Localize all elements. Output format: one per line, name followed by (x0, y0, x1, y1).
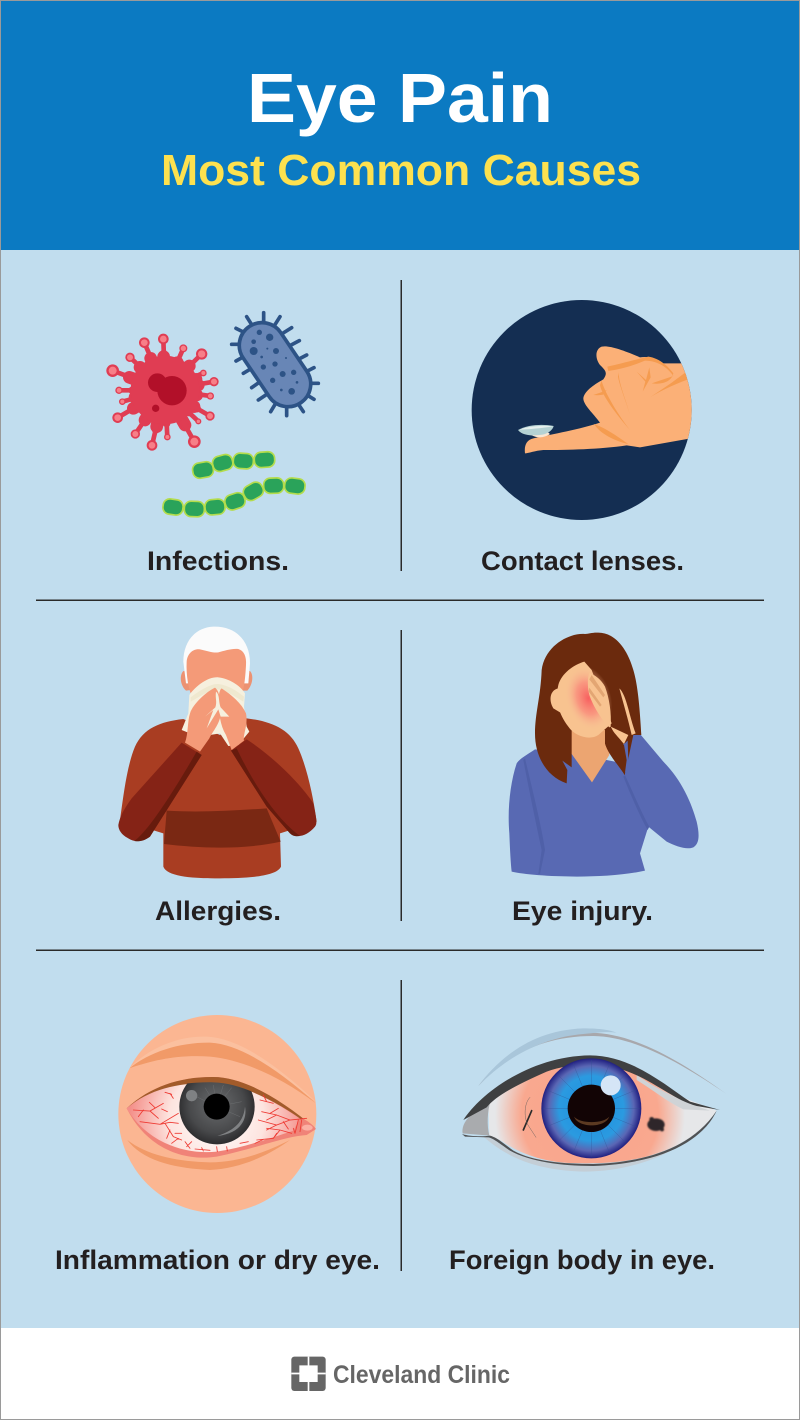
sclera (488, 1062, 717, 1163)
footer band (0, 1328, 800, 1420)
neck (570, 730, 609, 782)
highlights (186, 1090, 197, 1101)
icon: blue bacterium (230, 313, 320, 416)
tissue (182, 677, 249, 746)
contact lens (518, 425, 554, 437)
icon: red virus (106, 334, 219, 451)
iris (541, 1058, 641, 1158)
lower lid shadow (483, 1112, 717, 1172)
sclera (127, 1083, 310, 1152)
label: allergies: Allergies. (155, 896, 281, 926)
pain glow (556, 660, 620, 737)
eyebrow fold (478, 1033, 727, 1094)
label: infections: Infections. (147, 546, 289, 576)
hand (588, 673, 628, 744)
ear (551, 688, 562, 713)
subtitle: Most Common Causes (161, 146, 641, 195)
hair strand (605, 727, 627, 775)
lid rim (127, 1077, 316, 1158)
right hand (219, 688, 247, 750)
hair (535, 633, 641, 783)
hand creases (593, 357, 693, 444)
icon: red inflamed eye (118, 1015, 316, 1213)
sweater (509, 730, 699, 877)
corner (462, 1100, 491, 1136)
iris (179, 1082, 255, 1144)
eyelash foreign body (523, 1097, 536, 1137)
lower lid crease (127, 1140, 290, 1170)
veins (133, 1092, 307, 1152)
highlight (601, 1075, 621, 1095)
logo mark (291, 1357, 326, 1391)
tear duct (292, 1118, 316, 1135)
pupil (204, 1094, 230, 1120)
pupil (568, 1085, 615, 1132)
skin circle (118, 1015, 316, 1213)
upper lid (463, 1055, 720, 1120)
icon: infections (virus, bacterium, chains) (106, 313, 320, 517)
left sleeve (118, 743, 202, 841)
face (557, 662, 612, 738)
label: eye injury: Eye injury. (512, 896, 653, 926)
logo text: Cleveland Clinic (333, 1361, 510, 1389)
left hand (185, 688, 221, 752)
speck foreign body (647, 1117, 665, 1131)
icon: foreign body in eye (462, 1028, 727, 1172)
label: foreign body: Foreign body in eye. (449, 1245, 715, 1275)
sweater body (120, 718, 317, 878)
lid shadow (637, 1075, 710, 1111)
title: Eye Pain (247, 59, 553, 137)
icon: man blowing nose (118, 627, 317, 878)
header band (0, 0, 800, 250)
face (187, 649, 246, 700)
sweater band (164, 808, 281, 848)
hair (183, 627, 250, 683)
icon: woman holding injured eye (509, 633, 699, 877)
hand (525, 346, 700, 453)
dark circle (472, 300, 692, 520)
ears (181, 671, 252, 691)
cuff (615, 741, 628, 774)
upper lid creases (129, 1037, 316, 1102)
label: contact lenses: Contact lenses. (481, 546, 684, 576)
label: inflammation or dry eye: Inflammation or dry eye. (55, 1245, 380, 1275)
icon: contact lens on fingertip (472, 300, 700, 520)
right sleeve (231, 739, 316, 836)
logo: Cleveland Clinic (291, 1357, 510, 1391)
icon: green bacteria chains (162, 451, 306, 517)
